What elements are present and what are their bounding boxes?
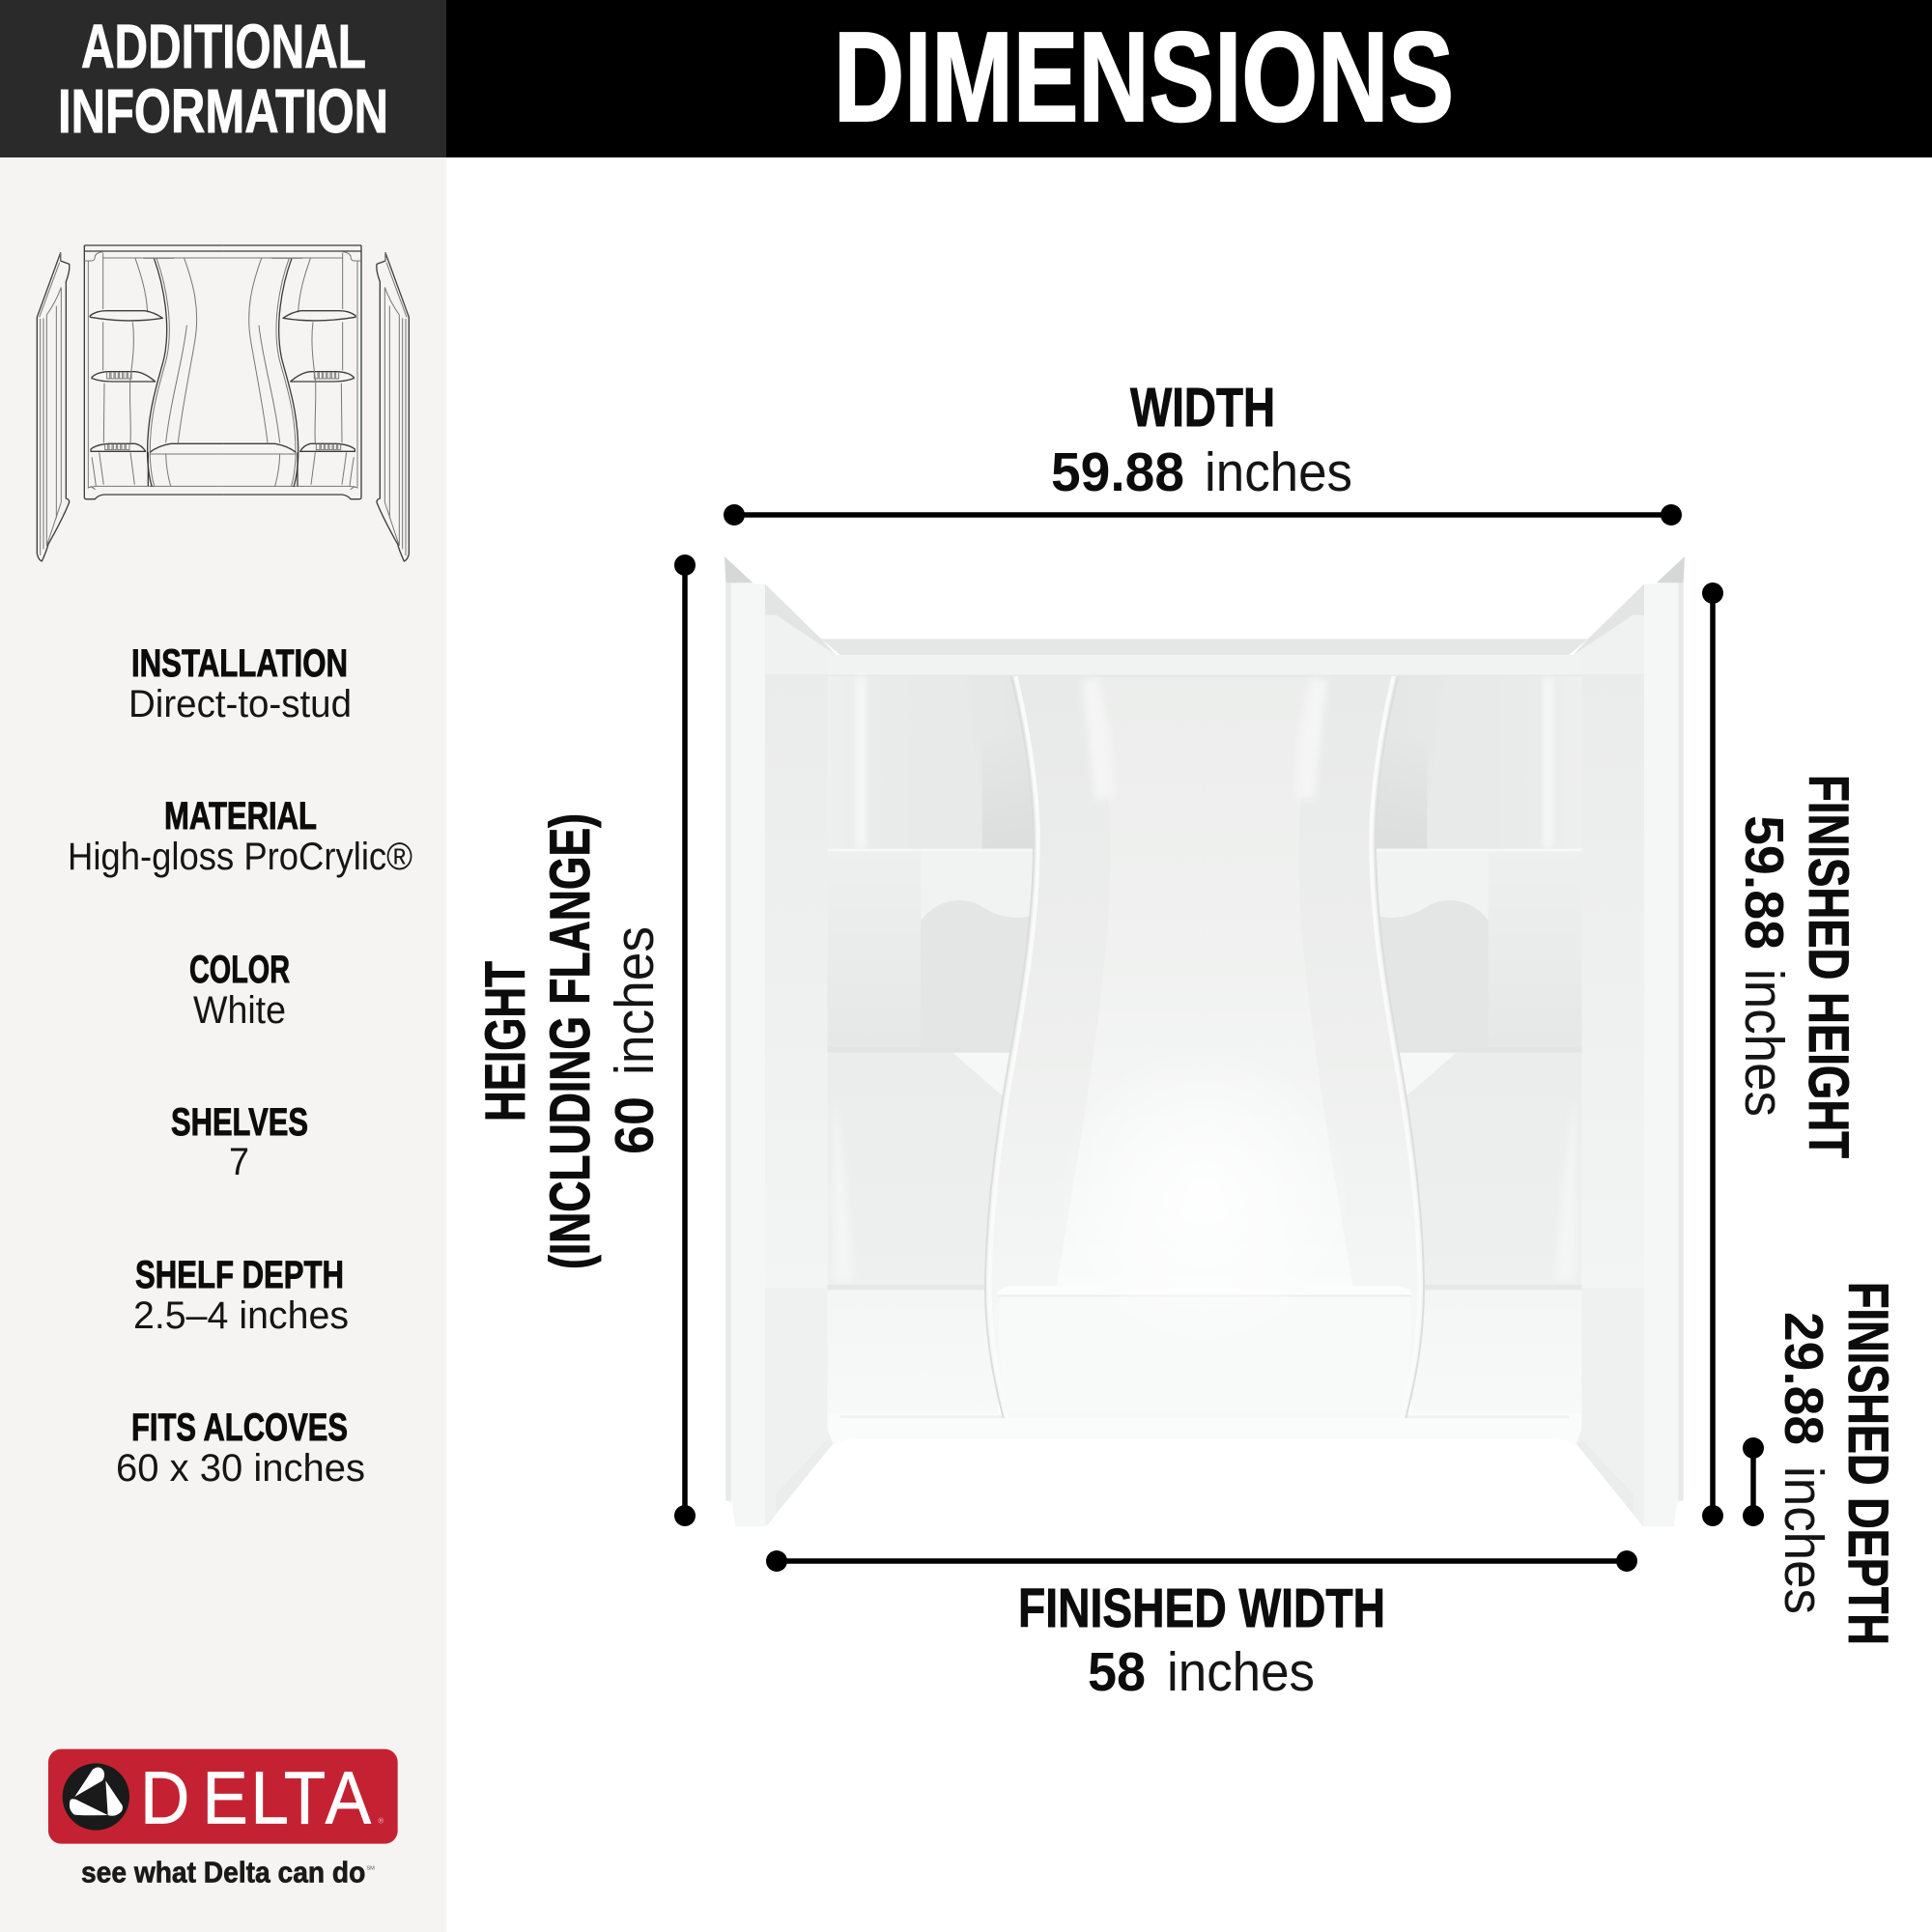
panel: additional information sidebar <box>0 157 446 1932</box>
spec: color: COLOR <box>189 949 290 991</box>
spec: fits alcoves: FITS ALCOVES <box>131 1406 348 1449</box>
spec: shelves <box>171 1101 308 1183</box>
spec: color <box>189 949 290 1032</box>
heading: dimensions <box>446 0 1932 157</box>
dimension label: finished height <box>1733 775 1860 1158</box>
dimension label: height including flange: (INCLUDING FLANGE) <box>539 813 602 1269</box>
logo: delta: DELTA <box>140 1756 372 1839</box>
icon: exploded line drawing of wall set <box>37 245 409 561</box>
spec: installation: INSTALLATION <box>131 642 348 685</box>
dimension label: finished height: inches <box>1733 969 1795 1117</box>
dimension label: height including flange <box>474 813 666 1269</box>
spec: shelves: SHELVES <box>171 1101 308 1144</box>
heading: additional information <box>0 0 446 157</box>
spec: fits alcoves <box>116 1406 365 1490</box>
dimension label: height including flange: 60 <box>604 1096 666 1154</box>
spec: shelves: 7 <box>229 1141 249 1183</box>
spec: shelf depth: SHELF DEPTH <box>135 1254 344 1296</box>
dimension label: finished depth: FINISHED DEPTH <box>1836 1282 1899 1645</box>
dimension label: finished height: FINISHED HEIGHT <box>1797 775 1860 1158</box>
dimension label: height including flange: inches <box>604 926 666 1075</box>
spec: installation: Direct-to-stud <box>128 683 352 725</box>
dimension label: width <box>1051 377 1352 503</box>
dimension label: finished height: 59.88 <box>1733 815 1795 950</box>
spec: fits alcoves: 60 x 30 inches <box>116 1447 365 1490</box>
heading: additional information: ADDITIONAL <box>81 12 366 81</box>
dimension label: finished depth: 29.88 <box>1773 1312 1834 1445</box>
heading: dimensions: DIMENSIONS <box>834 6 1454 148</box>
logo: delta: SM <box>366 1865 375 1871</box>
dimension label: finished depth: inches <box>1773 1466 1834 1614</box>
heading: additional information: INFORMATION <box>58 76 388 146</box>
dimension label: finished depth <box>1773 1282 1899 1645</box>
dimension line: finished width <box>766 1550 1637 1572</box>
logo: delta: see what Delta can do <box>81 1857 365 1889</box>
dimension label: width: WIDTH <box>1130 377 1275 439</box>
dimension line: height including flange <box>674 554 696 1526</box>
spec: shelf depth: 2.5–4 inches <box>133 1294 349 1337</box>
spec: installation <box>128 642 352 725</box>
spec: material: High-gloss ProCrylic® <box>68 836 412 878</box>
dimension line: width <box>724 504 1682 526</box>
dimension label: finished width: inches <box>1167 1641 1315 1703</box>
dimension line: finished height <box>1702 582 1723 1526</box>
spec: material <box>68 795 412 878</box>
logo: delta <box>48 1749 398 1889</box>
dimension label: width: 59.88 <box>1051 441 1184 503</box>
dimension line: finished depth <box>1743 1437 1764 1526</box>
dimension label: width: inches <box>1205 441 1352 503</box>
dimension label: finished width: FINISHED WIDTH <box>1018 1577 1385 1639</box>
dimension label: finished width: 58 <box>1088 1641 1146 1703</box>
spec: shelf depth <box>133 1254 349 1337</box>
spec: color: White <box>193 989 286 1032</box>
product photo: shower wall set <box>724 556 1685 1526</box>
logo: delta: ® <box>378 1816 384 1825</box>
spec: material: MATERIAL <box>164 795 317 838</box>
dimension label: finished width <box>1018 1577 1385 1703</box>
dimension label: height including flange: HEIGHT <box>474 961 537 1122</box>
